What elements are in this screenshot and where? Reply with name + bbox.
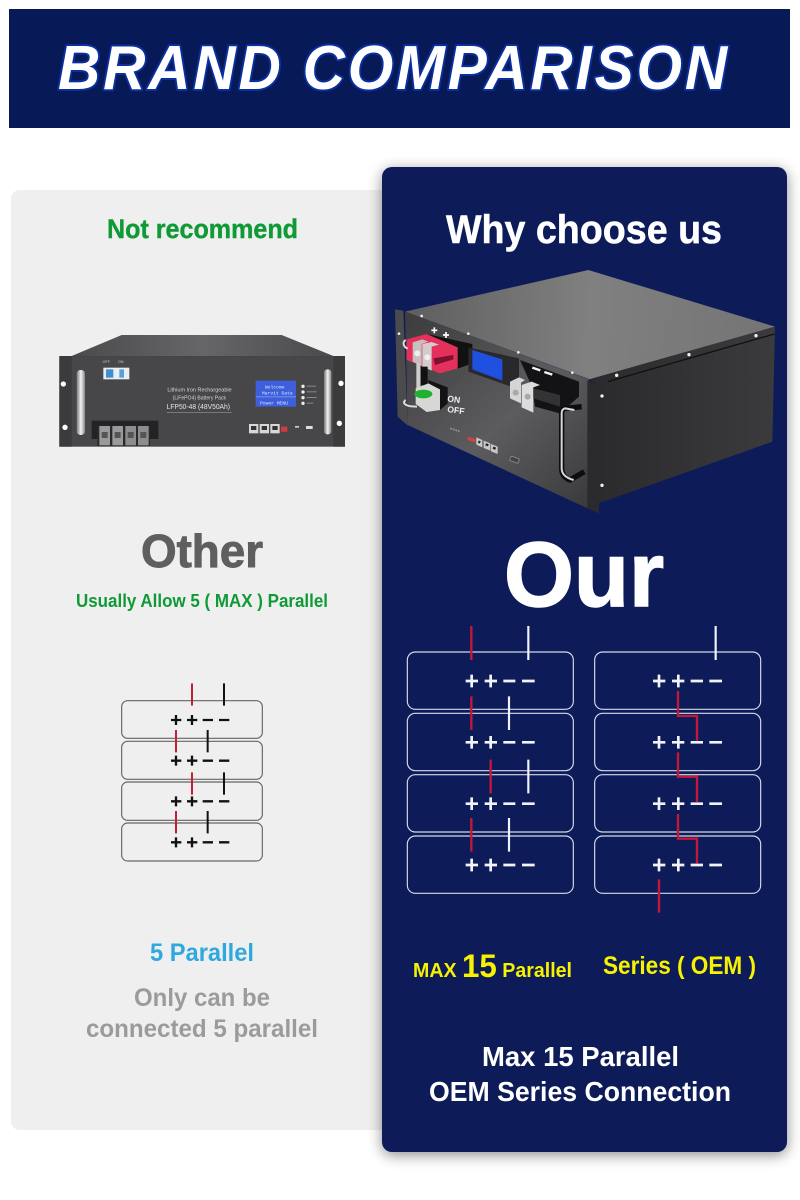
- text: limitation: [86, 984, 318, 1043]
- heading: not recommend: Not recommend: [107, 214, 298, 244]
- text: summary: OEM Series Connection: [429, 1076, 731, 1107]
- product photo: other battery: Welcome: [265, 384, 285, 390]
- diagram: fifteen parallel connection: [407, 626, 573, 893]
- product photo: our battery: ON: [447, 393, 461, 405]
- product photo: other battery: ON: [118, 360, 124, 364]
- title: BRAND COMPARISON: [58, 34, 730, 103]
- text: summary: [429, 1041, 731, 1107]
- product photo: other battery: Lithium Iron Rechargeable: [167, 388, 232, 394]
- panel: other brand: [11, 190, 396, 1130]
- diagram: series connection: [595, 626, 761, 913]
- heading: our: Our: [504, 524, 664, 626]
- product photo: our battery: OFF: [447, 404, 465, 416]
- product photo: other battery: (LiFePO4) Battery Pack: [173, 395, 226, 401]
- text: limitation: Only can be: [134, 984, 270, 1012]
- title banner: [9, 9, 790, 128]
- text: summary: Max 15 Parallel: [482, 1041, 679, 1072]
- panel: why choose us: [382, 167, 787, 1152]
- product photo: other battery: [59, 335, 345, 447]
- text: limitation: connected 5 parallel: [86, 1015, 318, 1043]
- label: max 15 parallel: MAX 15 Parallel: [413, 948, 572, 984]
- label: 5 parallel: 5 Parallel: [150, 939, 254, 967]
- text: usually allow: Usually Allow 5 ( MAX ) Parallel: [76, 591, 328, 611]
- product photo: other battery: Marvit Data: [262, 390, 293, 396]
- product photo: other battery: Power MENU: [260, 400, 288, 406]
- product photo: other battery: OFF: [103, 360, 111, 364]
- label: series oem: Series ( OEM ): [603, 952, 756, 980]
- product photo: other battery: LFP50-48 (48V50Ah): [167, 402, 230, 411]
- heading: other: Other: [141, 525, 263, 577]
- diagram: five parallel connection: [122, 683, 262, 861]
- heading: why choose us: Why choose us: [446, 208, 722, 252]
- product photo: our battery: [395, 270, 775, 513]
